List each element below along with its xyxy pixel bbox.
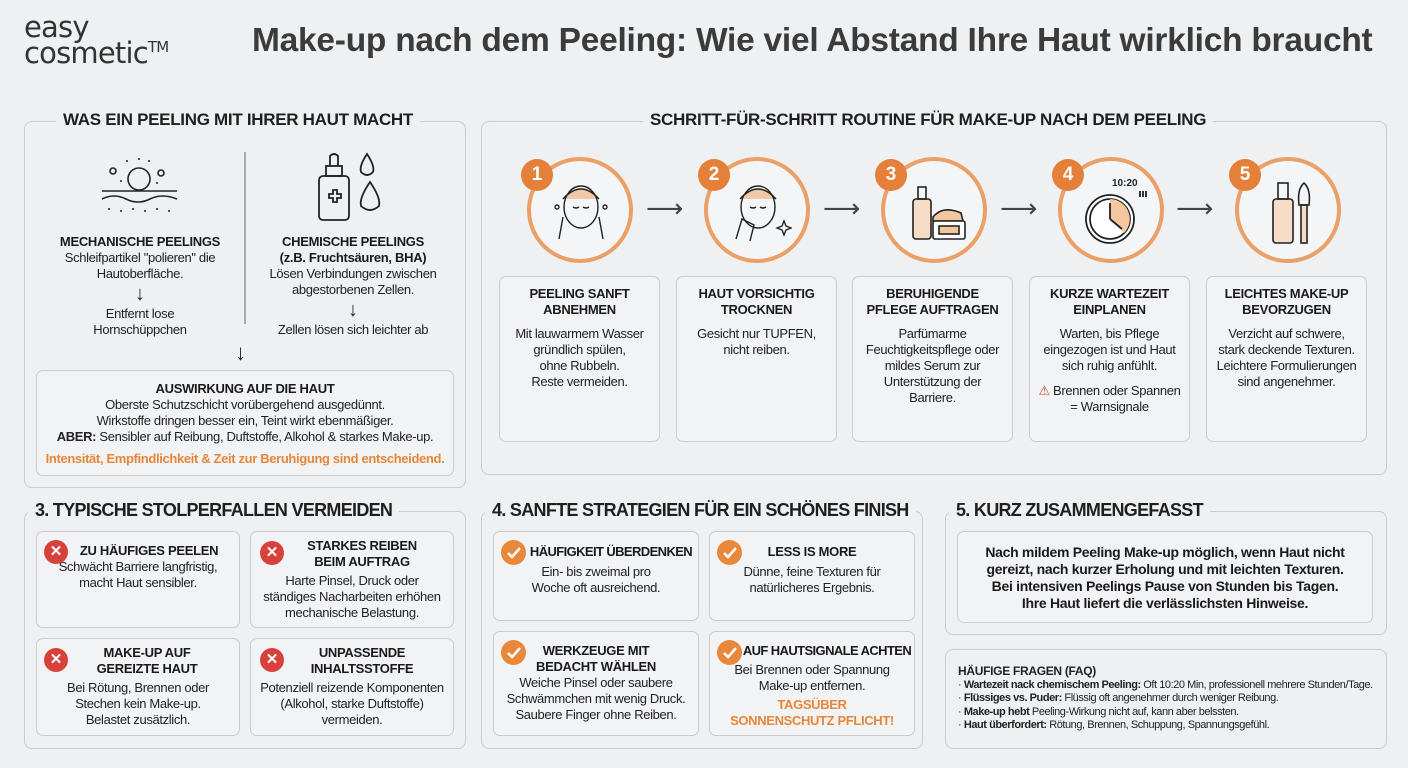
card: zu häufiges peelen: macht Haut sensibler. [79,575,197,590]
badge 2 [698,159,730,191]
heading: WAS EIN PEELING MIT IHRER HAUT MACHT [63,110,413,129]
panel: kurz zusammengefasst [945,511,1387,635]
step 2 icon [704,157,810,263]
step card 4: eingezogen ist und Haut [1043,342,1176,357]
heading: 3. TYPISCHE STOLPERFALLEN VERMEIDEN [35,500,392,520]
text: mechanische peelings: Entfernt lose [106,306,174,321]
step card 4: Warten, bis Pflege [1060,326,1159,341]
heading: 4. SANFTE STRATEGIEN FÜR EIN SCHÖNES FINISH [492,500,909,520]
step 1 icon [527,157,633,263]
title: Make-up nach dem Peeling: Wie viel Abstand Ihre Haut wirklich braucht [252,22,1372,59]
faq box: · Haut überfordert: Rötung, Brennen, Schuppung, Spannungsgefühl. [958,719,1269,731]
text: mechanische peelings: Hautoberfläche. [97,266,183,281]
step card 4 [1029,276,1190,442]
step card 4: EINPLANEN [1073,302,1146,317]
card: make-up auf gereizte haut: Belastet zusätzlich. [86,712,190,727]
step card 3: BERUHIGENDE [886,286,979,301]
faq box: · Make-up hebt Peeling-Wirkung nicht auf, kann aber belssten. [958,706,1239,718]
arrow: ⟶ [823,194,860,224]
card: hautsignale: TAGSÜBER [777,697,847,712]
badge 1: 1 [532,164,542,185]
step card 3: Unterstützung der [884,374,981,389]
card: starkes reiben: BEIM AUFTRAG [314,554,410,569]
card: make-up auf gereizte haut: GEREIZTE HAUT [97,661,197,676]
step card 4: = Warnsignale [1070,399,1149,414]
box: auswirkung: Oberste Schutzschicht vorübergehend ausgedünnt. [105,397,385,412]
step card 1: ABNEHMEN [543,302,616,317]
card: werkzeuge: Weiche Pinsel oder saubere [519,675,673,690]
summary box [957,531,1373,623]
step card 3: mildes Serum zur [885,358,980,373]
icon: mechanical peeling [102,158,178,212]
badge 3: 3 [886,164,896,185]
icon: chemical peeling [318,152,380,221]
step card 5: Leichtere Formulierungen [1217,358,1356,373]
text: mechanische peelings: ↓ [135,283,145,305]
step card 3: Parfümarme [898,326,967,341]
faq box [945,649,1387,749]
step 5 icon [1235,157,1341,263]
text: mechanische peelings: MECHANISCHE PEELINGS [60,234,220,249]
step card 3: Barriere. [909,390,956,405]
card: make-up auf gereizte haut [36,638,240,736]
step card 4: ⚠ Brennen oder Spannen [1038,383,1181,398]
box: auswirkung [36,370,454,476]
card: hautsignale: AUF HAUTSIGNALE ACHTEN [743,643,911,658]
arrow: ⟶ [646,194,683,224]
box: auswirkung: Intensität, Empfindlichkeit & Zeit zur Beruhigung sind entscheidend. [46,451,444,466]
text: chemische peelings: Zellen lösen sich leichter ab [278,322,428,337]
card: zu häufiges peelen [36,531,240,628]
step card 1: ohne Rubbeln. [539,358,620,373]
card: unpassende inhaltsstoffe: ✕ [266,651,278,668]
panel: stolperfallen [24,511,466,749]
panel: was ein peeling macht [24,121,466,488]
card: unpassende inhaltsstoffe: vermeiden. [322,712,382,727]
step icons [521,157,1341,263]
step card 2: nicht reiben. [723,342,790,357]
step card 2: HAUT VORSICHTIG [698,286,815,301]
badge 5: 5 [1240,164,1250,185]
heading: SCHRITT-FÜR-SCHRITT ROUTINE FÜR MAKE-UP NACH DEM PEELING [650,110,1206,129]
card: less is more: LESS IS MORE [768,544,856,559]
card: unpassende inhaltsstoffe: (Alkohol, starke Duftstoffe) [280,696,424,711]
step card 4: sich ruhig anfühlt. [1062,358,1157,373]
step card 2: Gesicht nur TUPFEN, [697,326,816,341]
card: werkzeuge: Schwämmchen mit wenig Druck. [507,691,685,706]
step card 2 [676,276,837,442]
summary box: Ihre Haut liefert die verlässlichsten Hinweise. [1022,595,1308,611]
step card 1: PEELING SANFT [529,286,630,301]
card: unpassende inhaltsstoffe: INHALTSSTOFFE [311,661,413,676]
card: hautsignale: SONNENSCHUTZ PFLICHT! [730,713,894,728]
step card 2: TROCKNEN [721,302,792,317]
card: häufigkeit [493,531,699,621]
step 4 icon [1058,157,1164,263]
card: make-up auf gereizte haut: MAKE-UP AUF [104,645,190,660]
divider [244,152,246,324]
summary box: Nach mildem Peeling Make-up möglich, wenn Haut nicht [985,544,1345,560]
panel: strategien [481,511,923,749]
text: chemische peelings: Lösen Verbindungen zwischen [270,266,436,281]
card: less is more: Dünne, feine Texturen für [744,564,880,579]
step 4 icon: 10:20 [1112,178,1138,189]
card: unpassende inhaltsstoffe [250,638,454,736]
card: häufigkeit: Woche oft ausreichend. [532,580,660,595]
card: starkes reiben: Harte Pinsel, Druck oder [285,573,419,588]
badge 1 [521,159,553,191]
card: less is more [709,531,915,621]
step card 1 [499,276,660,442]
card: werkzeuge [493,631,699,736]
card: zu häufiges peelen: ZU HÄUFIGES PEELEN [80,543,218,558]
arrow: ↓ [235,340,246,365]
step card 5: BEVORZUGEN [1242,302,1331,317]
logo [24,10,168,70]
badge 3 [875,159,907,191]
step card 1: Mit lauwarmem Wasser [515,326,644,341]
text: mechanische peelings [60,234,220,337]
step 3 icon [881,157,987,263]
text: chemische peelings: (z.B. Fruchtsäuren, BHA) [280,250,426,265]
text: chemische peelings: ↓ [348,299,358,321]
card: make-up auf gereizte haut: Bei Rötung, Brennen oder [67,680,209,695]
card: less is more: natürlicheres Ergebnis. [750,580,874,595]
card: unpassende inhaltsstoffe: UNPASSENDE [319,645,405,660]
text: chemische peelings [270,234,436,337]
step card 3 [852,276,1013,442]
step card 1: Reste vermeiden. [531,374,628,389]
badge 5 [1229,159,1261,191]
arrow: ⟶ [1000,194,1037,224]
summary box: Bei intensiven Peelings Pause von Stunden bis Tagen. [992,578,1338,594]
step card 5: stark deckende Texturen. [1218,342,1355,357]
summary box: gereizt, nach kurzer Erholung und mit leichten Texturen. [986,561,1344,577]
text: mechanische peelings: Schleifpartikel "polieren" die [65,250,215,265]
card: werkzeuge: WERKZEUGE MIT [543,643,649,658]
card: starkes reiben: ständiges Nacharbeiten erhöhen [263,589,441,604]
faq box: HÄUFIGE FRAGEN (FAQ) [958,664,1096,678]
card: zu häufiges peelen: Schwächt Barriere langfristig, [59,559,217,574]
faq box: · Flüssiges vs. Puder: Flüssig oft angenehmer durch weniger Reibung. [958,692,1278,704]
card: zu häufiges peelen: ✕ [50,543,62,560]
step card 5: sind angenehmer. [1238,374,1335,389]
card: make-up auf gereizte haut: ✕ [50,651,62,668]
card: hautsignale: Make-up entfernen. [759,678,865,693]
step card 5: Verzicht auf schwere, [1228,326,1345,341]
box: auswirkung: Wirkstoffe dringen besser ein, Teint wirkt ebenmäßiger. [97,413,393,428]
card: häufigkeit: Ein- bis zweimal pro [541,564,651,579]
panel: routine [481,121,1387,475]
card: starkes reiben: ✕ [266,544,278,561]
logo: easy [24,10,89,44]
faq box: · Wartezeit nack chemischem Peeling: Oft 10:20 Min, professionell mehrere Stunden/Tage. [958,678,1373,690]
text: mechanische peelings: Hornschüppchen [93,322,187,337]
box: auswirkung: ABER: Sensibler auf Reibung, Duftstoffe, Alkohol & starkes Make-up. [57,429,433,444]
step card 1: gründlich spülen, [533,342,626,357]
card: werkzeuge: Saubere Finger ohne Reiben. [515,707,677,722]
badge 2: 2 [709,164,719,185]
box: auswirkung: AUSWIRKUNG AUF DIE HAUT [156,381,334,396]
card: hautsignale: Bei Brennen oder Spannung [734,662,890,677]
step card 4: KURZE WARTEZEIT [1050,286,1169,301]
text: chemische peelings: abgestorbenen Zellen. [292,282,414,297]
logo: cosmeticTM [24,36,168,70]
text: chemische peelings: CHEMISCHE PEELINGS [282,234,424,249]
card: starkes reiben: STARKES REIBEN [307,538,417,553]
arrow: ⟶ [1176,194,1213,224]
step card 3: Feuchtigkeitspflege oder [866,342,999,357]
card: starkes reiben [250,531,454,628]
badge 4: 4 [1063,164,1073,185]
card: unpassende inhaltsstoffe: Potenziell reizende Komponenten [260,680,444,695]
heading: 5. KURZ ZUSAMMENGEFASST [956,500,1203,520]
badge 4 [1052,159,1084,191]
step card 5: LEICHTES MAKE-UP [1225,286,1348,301]
card: häufigkeit: HÄUFIGKEIT ÜBERDENKEN [530,544,692,559]
card: make-up auf gereizte haut: Stechen kein Make-up. [75,696,201,711]
card: starkes reiben: mechanische Belastung. [285,605,419,620]
card: hautsignale [709,631,915,736]
step card 5 [1206,276,1367,442]
step card 3: PFLEGE AUFTRAGEN [867,302,998,317]
card: werkzeuge: BEDACHT WÄHLEN [536,659,656,674]
